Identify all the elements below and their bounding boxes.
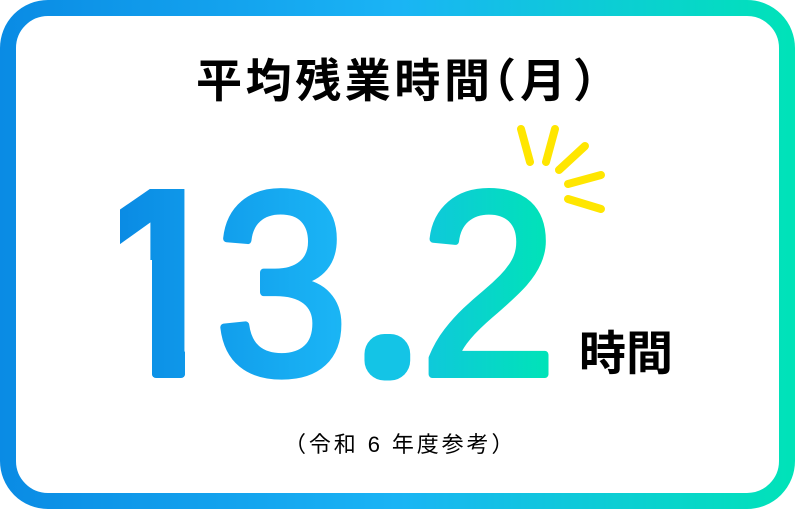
- title: ）: [573, 55, 623, 107]
- title: 平均残業時間: [196, 55, 494, 107]
- footnote: （令和 6 年度参考）: [284, 432, 516, 457]
- big number: 13.2: .: [379, 306, 396, 374]
- title: 月: [520, 55, 570, 107]
- unit label: 時間: [579, 327, 673, 380]
- icon: yellow sparkle lines: [521, 129, 601, 209]
- big number: 13.2: 3: [215, 139, 348, 429]
- big number: 13.2: [120, 188, 548, 380]
- title: （: [470, 55, 520, 107]
- big number: 13.2: 2: [420, 138, 557, 430]
- big number: 13.2: 1: [87, 131, 238, 435]
